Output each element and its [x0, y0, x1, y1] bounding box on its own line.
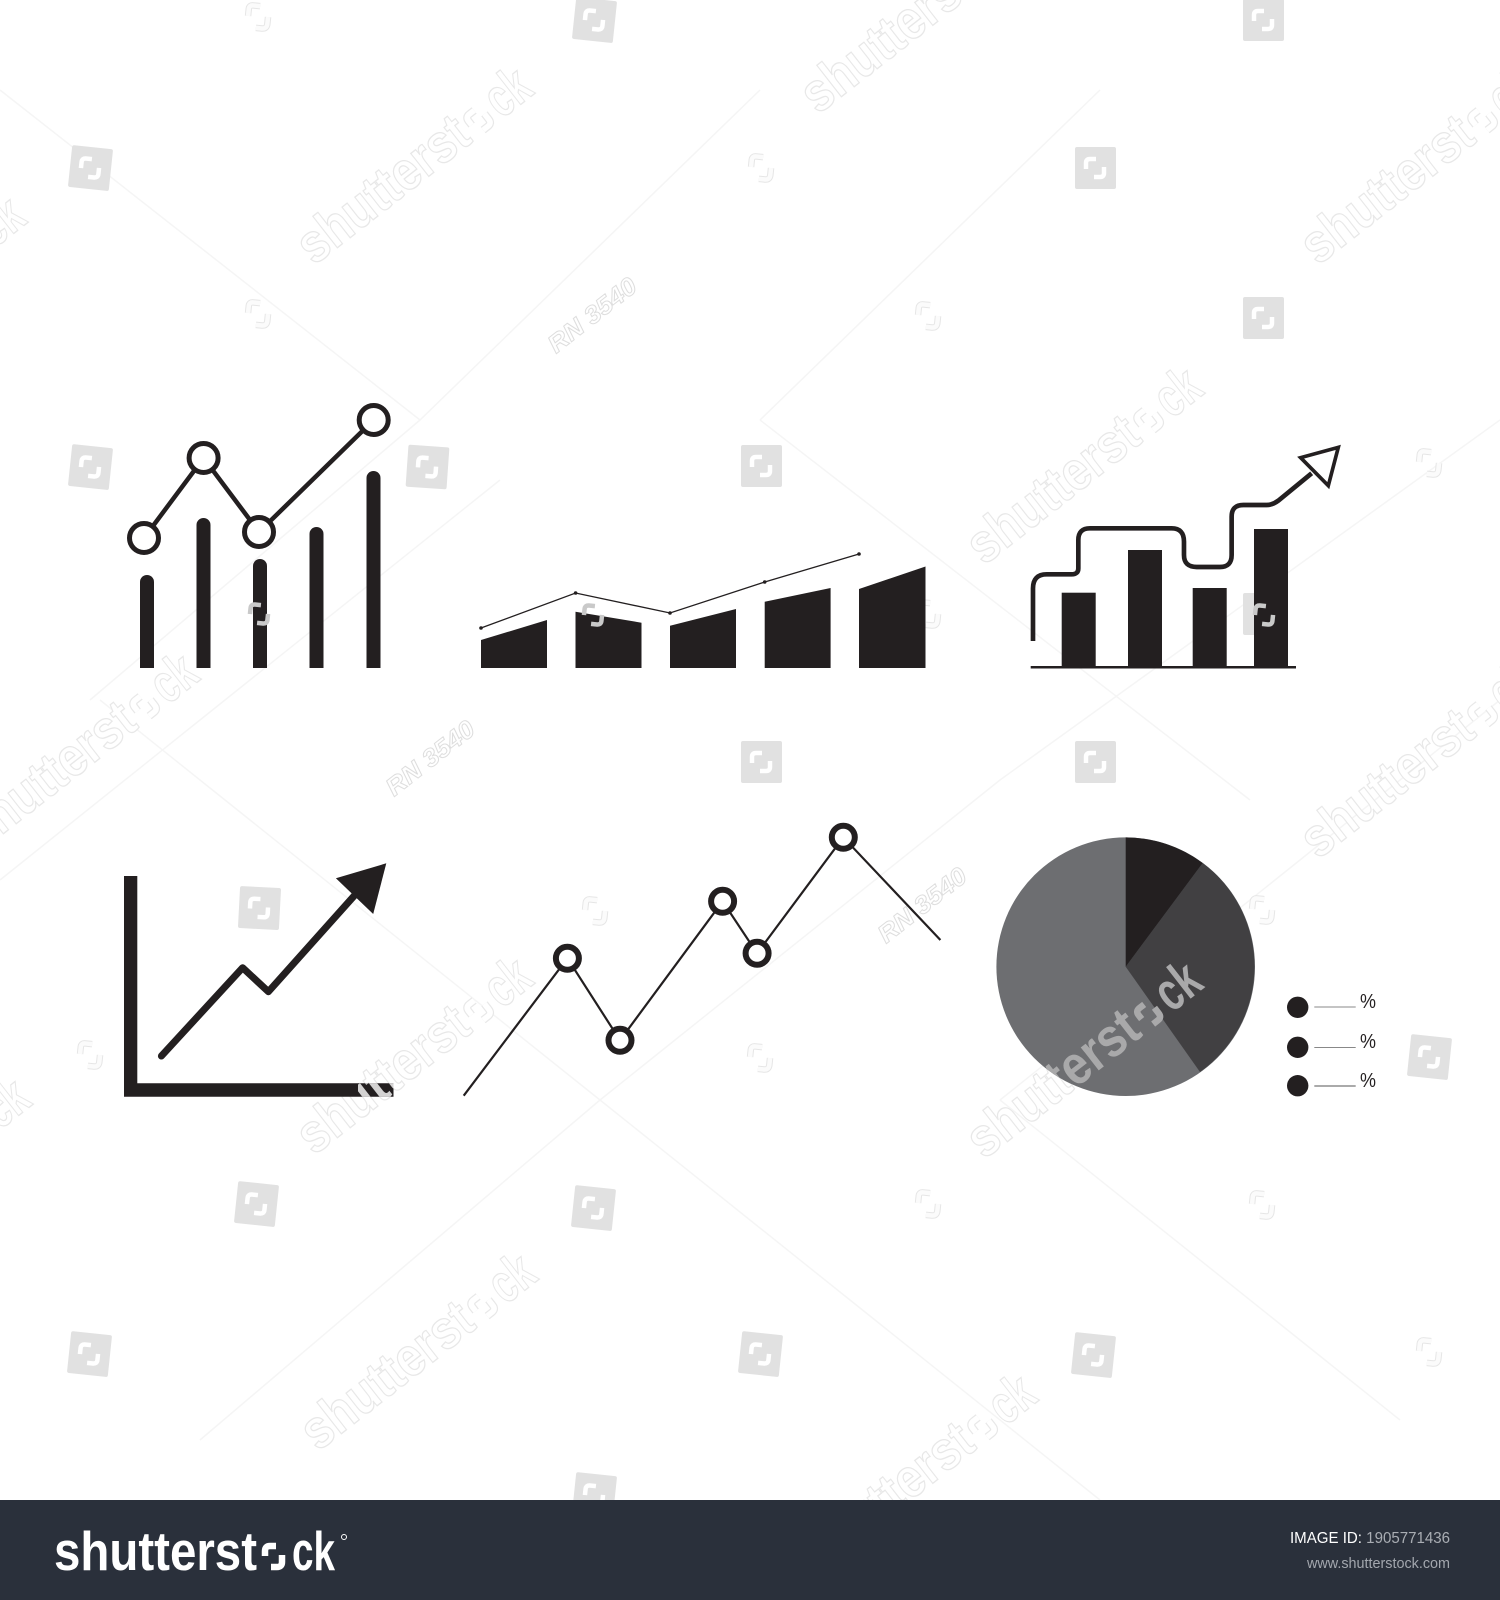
watermark layer: shutterst [787, 1409, 985, 1582]
chart: slanted bars with thin line [479, 552, 926, 668]
watermark layer: shutterst [953, 402, 1151, 575]
watermark layer: ck [475, 1239, 547, 1315]
image id: IMAGE ID: 1905771436 [1290, 1530, 1450, 1547]
baseline [1031, 666, 1296, 668]
chart: bars with circle line [130, 406, 388, 668]
pie legend: % [1360, 991, 1376, 1013]
watermark layer: ck [471, 53, 543, 129]
watermark layer: shutterst [283, 992, 481, 1165]
footer bar [0, 1500, 1500, 1600]
chart: line with ring markers [464, 826, 940, 1096]
watermark layer: shutterst [287, 1288, 485, 1461]
watermark layer: RN 3540 [380, 715, 481, 802]
watermark layer: shutterst [953, 996, 1151, 1169]
slanted bars [481, 566, 926, 668]
thin trend line [479, 552, 861, 630]
axes [124, 876, 394, 1097]
curved arrow [1033, 447, 1338, 641]
bars [140, 471, 380, 668]
pie chart: ck [1141, 947, 1213, 1023]
watermark layer: ck [471, 943, 543, 1019]
pie chart [996, 837, 1255, 1096]
watermark layer: ck [1141, 353, 1213, 429]
pie legend [1287, 991, 1376, 1096]
watermark layer: shutterst [283, 102, 481, 275]
watermark layer: ck [137, 639, 209, 715]
chart: axes with rising arrow: shutterst [283, 992, 481, 1165]
watermark layer: RN 3540 [872, 862, 973, 949]
footer logo: shutterst [54, 1520, 257, 1582]
chart: axes with rising arrow [124, 863, 394, 1097]
trend line with markers [130, 406, 388, 552]
watermark layer: ck [1141, 947, 1213, 1023]
pie legend: % [1360, 1070, 1376, 1092]
watermark layer: ck [975, 1360, 1047, 1436]
pie chart: shutterst [953, 996, 1151, 1169]
rising arrow [161, 863, 386, 1056]
footer logo: ck [292, 1520, 335, 1582]
website: www.shutterstock.com [1306, 1555, 1450, 1572]
watermark layer: RN 3540 [542, 272, 643, 359]
pie legend: % [1360, 1031, 1376, 1053]
chart: bars with curved arrow [1031, 447, 1338, 668]
bars [1062, 529, 1288, 667]
